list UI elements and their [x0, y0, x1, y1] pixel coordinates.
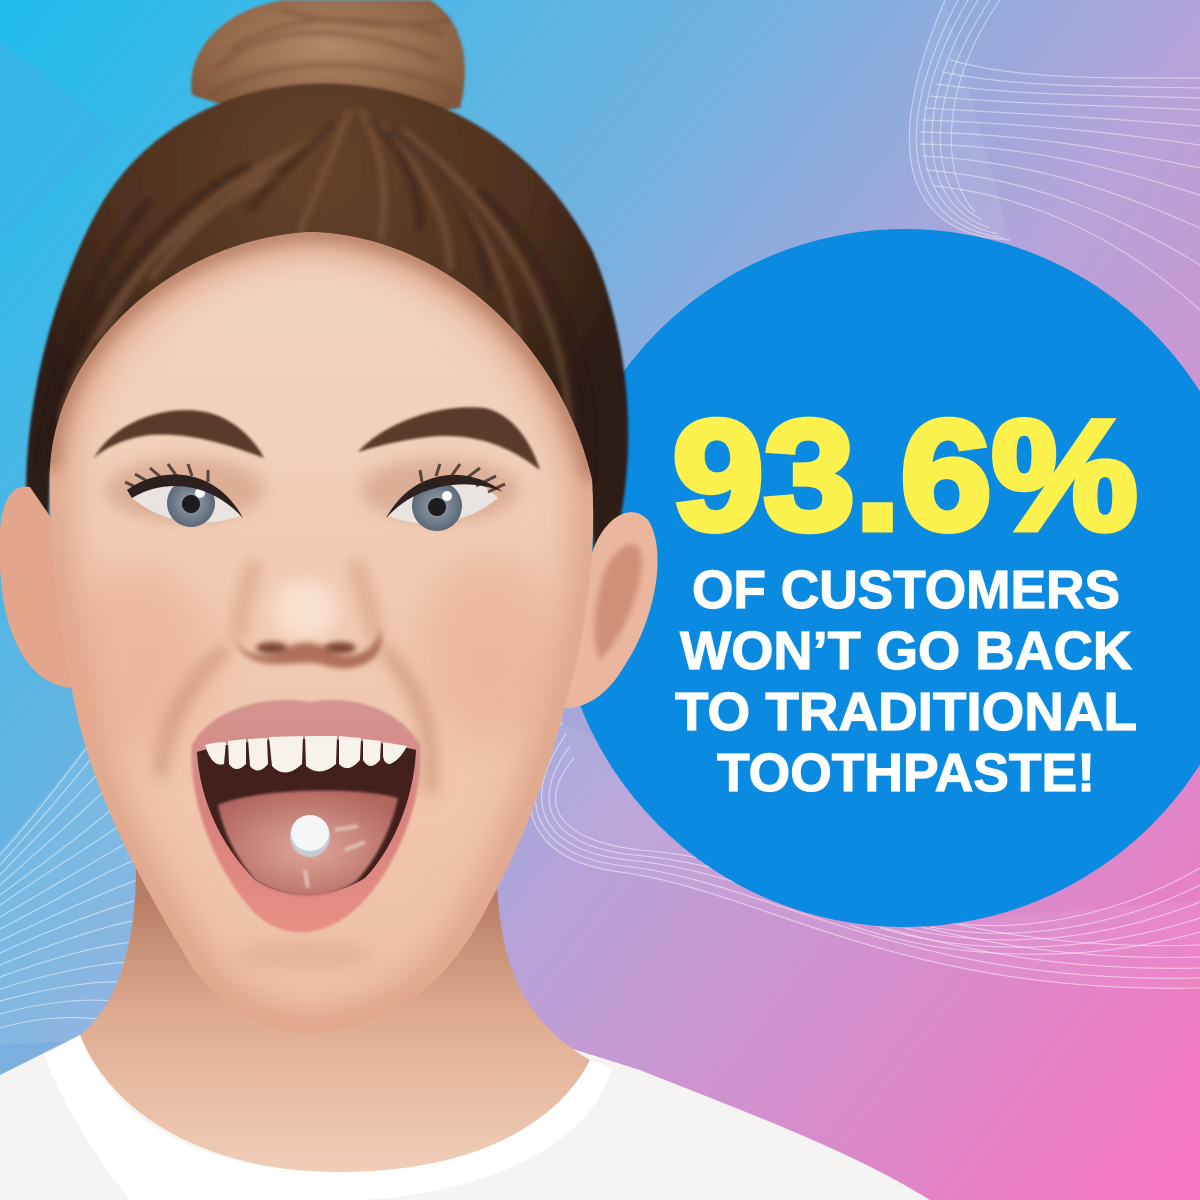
hair [26, 83, 628, 585]
shirt collar [45, 1035, 612, 1200]
right eyebrow [358, 407, 540, 470]
statistic caption [675, 560, 1137, 803]
blue statistic circle [556, 229, 1200, 927]
statistic caption: WON’T GO BACK [680, 621, 1132, 681]
right eye [386, 464, 505, 531]
hair bun [191, 0, 465, 130]
wave lines: bottom right [529, 710, 1200, 988]
shirt [0, 1035, 930, 1200]
left eye [125, 464, 243, 527]
face [40, 225, 610, 1040]
face edge shading [50, 232, 593, 1034]
wave lines: top right [909, 0, 1200, 310]
tablet [290, 815, 330, 857]
woman portrait [0, 0, 930, 1200]
hairline shadow [50, 232, 592, 480]
teeth [205, 736, 407, 773]
tongue sparkle [305, 826, 365, 888]
neck [80, 840, 590, 1172]
lips [192, 700, 421, 932]
mouth interior [197, 739, 416, 895]
chin shadow [243, 940, 366, 970]
right ear [560, 512, 658, 708]
left eye socket shadow [105, 458, 265, 522]
statistic caption: TOOTHPASTE! [717, 743, 1095, 803]
right eye socket shadow [360, 458, 520, 522]
left ear [0, 487, 80, 688]
statistic caption: OF CUSTOMERS [692, 560, 1120, 620]
right cheek blush [420, 555, 560, 745]
nose [232, 560, 382, 668]
statistic: 93.6%: 93.6% [672, 389, 1138, 563]
left eyebrow [94, 410, 264, 458]
left cheek blush [84, 562, 211, 753]
background diamond accent [0, 40, 115, 240]
tongue [218, 791, 398, 896]
smile lines [160, 650, 431, 790]
statistic caption: TO TRADITIONAL [675, 682, 1137, 742]
ear inner shade [595, 544, 642, 660]
wave lines: bottom left [0, 728, 137, 1045]
